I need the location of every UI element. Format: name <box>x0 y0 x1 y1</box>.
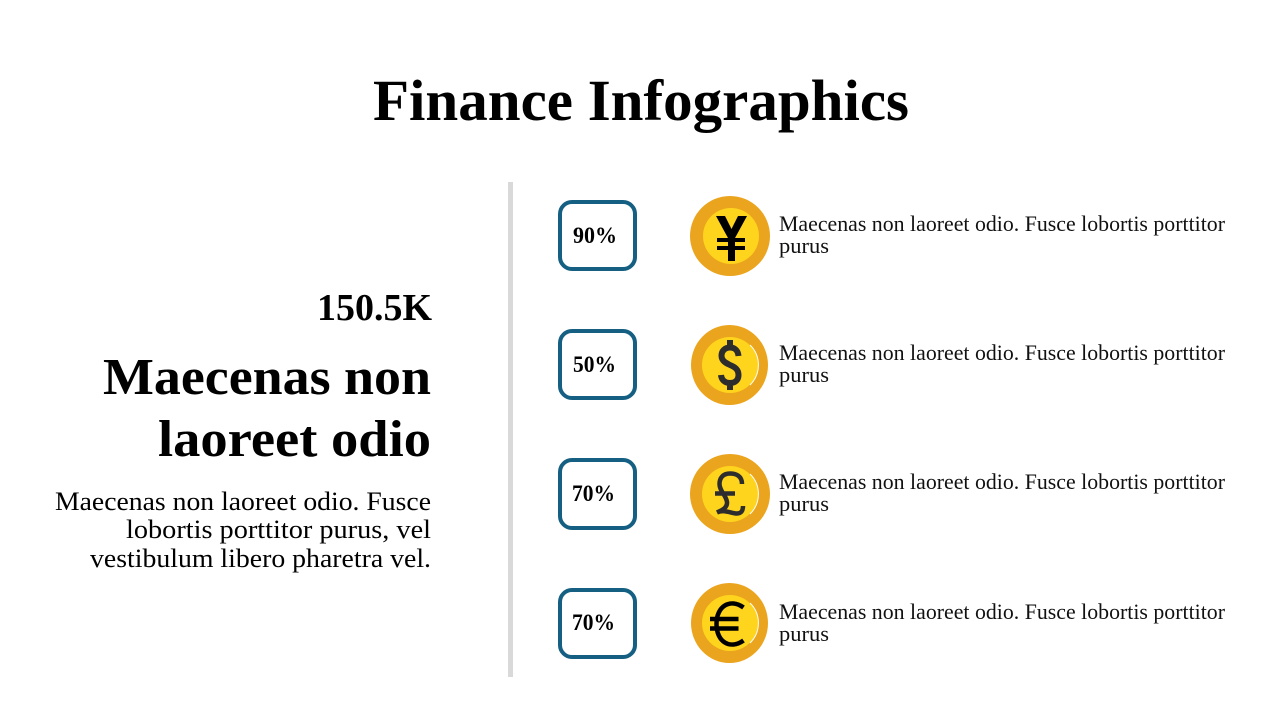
percent box 70%: 70% <box>572 610 615 635</box>
description: purus <box>779 233 829 258</box>
icon: dollar coin <box>691 325 768 405</box>
title: Finance Infographics <box>373 68 909 133</box>
description <box>779 211 1226 258</box>
description: Maecenas non laoreet odio. Fusce lobortis porttitor <box>779 469 1226 494</box>
subheading: laoreet odio <box>158 411 431 468</box>
percent box 90%: 90% <box>573 223 617 248</box>
body text <box>55 486 431 573</box>
percent box 70%: 70% <box>572 481 615 506</box>
description: purus <box>779 621 829 646</box>
icon: euro coin <box>691 583 768 663</box>
body text: vestibulum libero pharetra vel. <box>90 543 431 573</box>
percent box 90% <box>560 202 635 269</box>
description: purus <box>779 491 829 516</box>
description: Maecenas non laoreet odio. Fusce lobortis porttitor <box>779 340 1226 365</box>
row 3: pound <box>560 454 1226 534</box>
icon: yen coin <box>690 196 770 276</box>
percent box 70% <box>560 460 635 528</box>
subheading <box>103 349 431 468</box>
description: purus <box>779 362 829 387</box>
description <box>779 599 1226 646</box>
body text: lobortis porttitor purus, vel <box>126 514 431 544</box>
percent box 70% <box>560 590 635 657</box>
description: Maecenas non laoreet odio. Fusce lobortis porttitor <box>779 599 1226 624</box>
percent box 50% <box>560 331 635 398</box>
subheading: Maecenas non <box>103 349 431 406</box>
row 2: dollar <box>560 325 1226 405</box>
big number: 150.5K <box>317 287 432 329</box>
row 1: yen <box>560 196 1226 276</box>
vertical divider <box>508 182 513 677</box>
row 4: euro <box>560 583 1226 663</box>
panel: left summary <box>55 287 432 573</box>
description <box>779 469 1226 516</box>
icon: pound coin <box>690 454 770 534</box>
body text: Maecenas non laoreet odio. Fusce <box>55 486 431 516</box>
percent box 50%: 50% <box>573 352 616 377</box>
description: Maecenas non laoreet odio. Fusce lobortis porttitor <box>779 211 1226 236</box>
description <box>779 340 1226 387</box>
